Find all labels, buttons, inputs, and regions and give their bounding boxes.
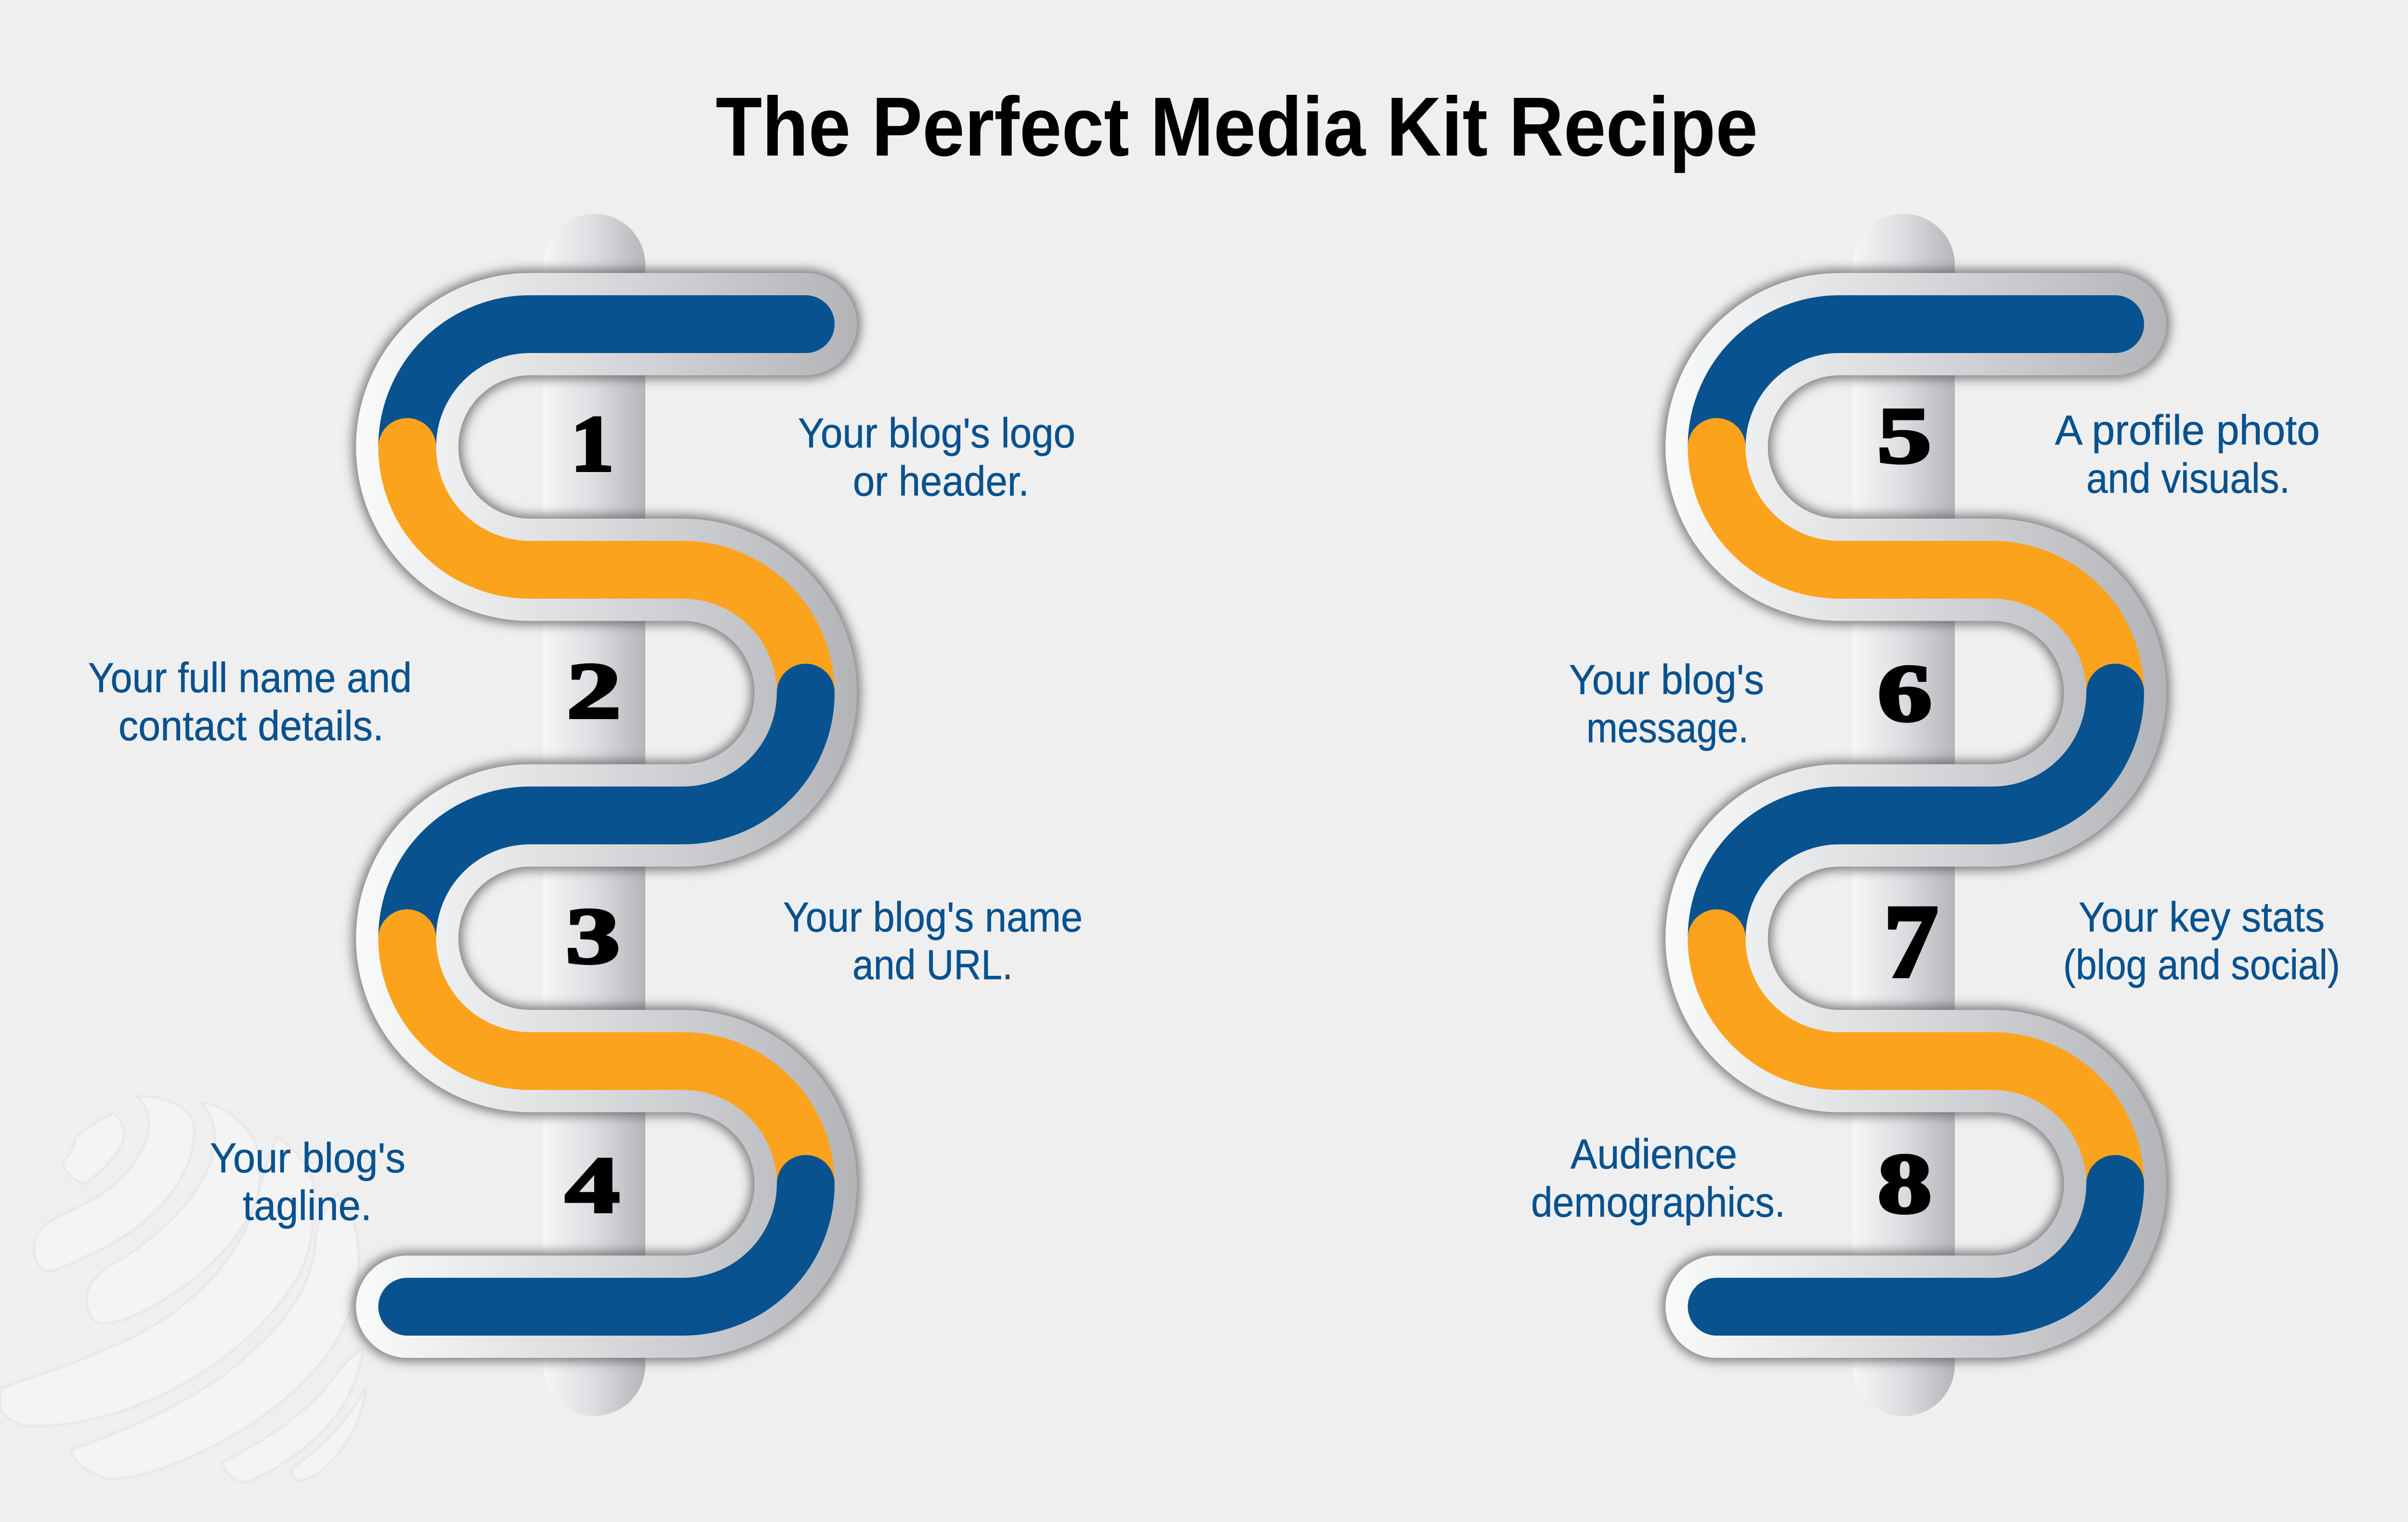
band shadow xyxy=(407,324,806,1307)
watermark: globe swirl xyxy=(0,1096,366,1482)
text block: step 8: Audience xyxy=(1570,1131,1737,1178)
number 4: 4 xyxy=(565,1141,619,1229)
text block: step 1 xyxy=(798,410,1075,505)
text block: step 3: and URL. xyxy=(852,942,1013,988)
blue segment 2 xyxy=(407,693,806,938)
orange segment 1 xyxy=(407,447,806,693)
text block: step 5: A profile photo xyxy=(2055,407,2320,454)
text block: step 7 xyxy=(2063,894,2340,988)
text block: step 3 xyxy=(783,894,1083,988)
text block: step 7: Your key stats xyxy=(2079,894,2325,941)
blue segment 3 xyxy=(1716,1184,2115,1307)
text block: step 4: tagline. xyxy=(243,1182,372,1229)
number 3: 3 xyxy=(566,892,620,980)
text block: step 2: contact details. xyxy=(118,703,384,749)
number 1: 1 xyxy=(571,400,614,488)
text block: step 6 xyxy=(1569,656,1764,751)
text block: step 1: Your blog's logo xyxy=(798,410,1075,457)
number 7: 7 xyxy=(1884,883,1938,999)
orange segment 1 xyxy=(1716,447,2115,693)
text block: step 8: demographics. xyxy=(1531,1179,1785,1226)
blue segment 1 xyxy=(407,324,806,447)
number 6: 6 xyxy=(1878,648,1932,738)
text block: step 4: Your blog's xyxy=(210,1135,406,1181)
panel: right serpentine steps 5-8 xyxy=(1716,214,2115,1416)
band shadow xyxy=(1716,324,2115,1307)
panel: left serpentine steps 1-4 xyxy=(407,214,806,1416)
blue segment 2 xyxy=(1716,693,2115,938)
number 5: 5 xyxy=(1877,391,1931,480)
blue segment 1 xyxy=(1716,324,2115,447)
text block: step 5: and visuals. xyxy=(2086,455,2290,502)
text block: step 1: or header. xyxy=(853,458,1029,505)
orange segment 2 xyxy=(407,938,806,1184)
text block: step 2: Your full name and xyxy=(88,655,412,701)
text block: step 4 xyxy=(210,1135,406,1229)
blue segment 3 xyxy=(407,1184,806,1307)
number 8: 8 xyxy=(1878,1136,1932,1231)
orange segment 2 xyxy=(1716,938,2115,1184)
silver band xyxy=(407,324,806,1307)
title: The Perfect Media Kit Recipe xyxy=(716,79,1758,173)
silver band xyxy=(1716,324,2115,1307)
pole xyxy=(543,214,645,1416)
text block: step 5 xyxy=(2055,407,2320,502)
text block: step 8 xyxy=(1531,1131,1785,1226)
text block: step 6: message. xyxy=(1586,705,1749,751)
pole xyxy=(1853,214,1955,1416)
text block: step 7: (blog and social) xyxy=(2063,942,2340,988)
number 2: 2 xyxy=(567,646,621,735)
text block: step 2 xyxy=(88,655,412,749)
text block: step 3: Your blog's name xyxy=(783,894,1083,941)
text block: step 6: Your blog's xyxy=(1569,656,1764,703)
